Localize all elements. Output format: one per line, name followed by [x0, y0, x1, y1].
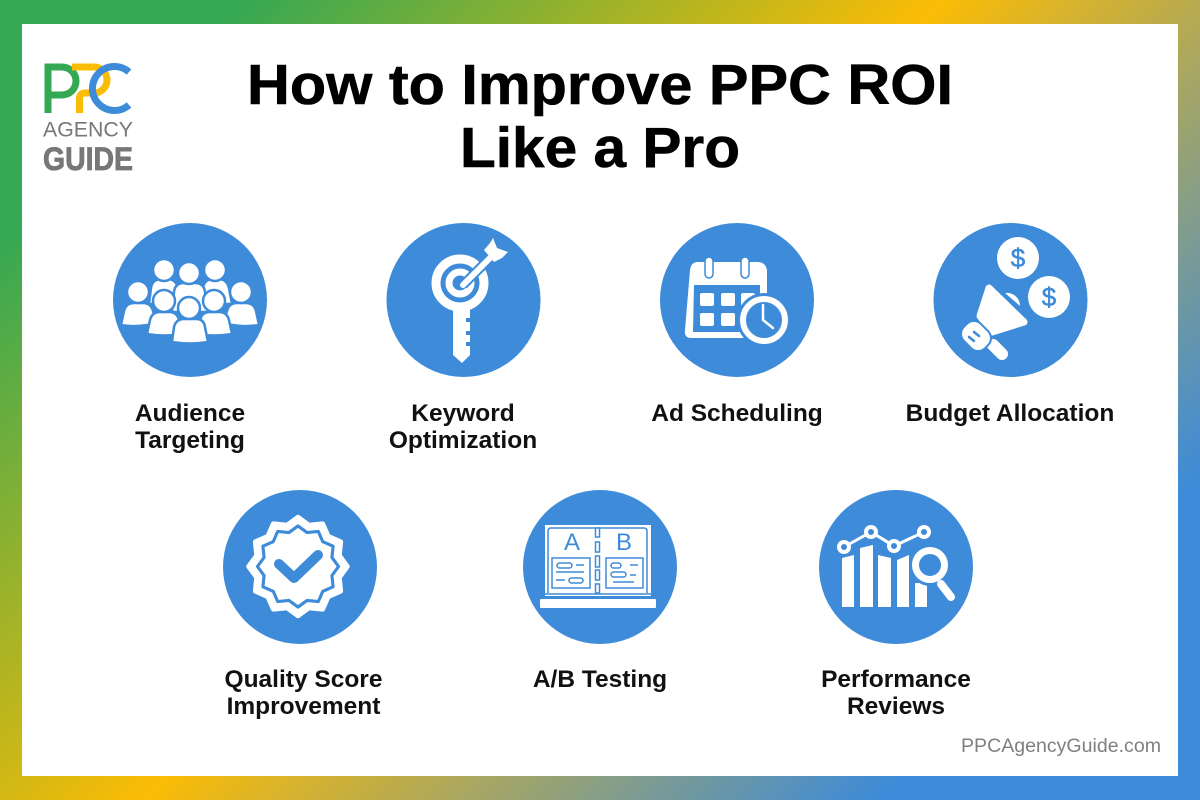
icon: quality badge	[223, 490, 377, 644]
logo: PPC Agency Guide: AGENCY	[43, 118, 133, 142]
item: Budget Allocation	[906, 223, 1114, 427]
label: Quality Score	[225, 666, 382, 693]
icon: megaphone and coins: $	[1042, 282, 1057, 312]
label: A/B Testing	[533, 666, 667, 693]
icon: chart and magnifier	[819, 490, 973, 644]
label: Performance	[821, 666, 971, 693]
item: Quality Score Improvement	[223, 490, 382, 720]
icon: megaphone and coins	[934, 223, 1088, 377]
item: Audience Targeting	[113, 223, 267, 454]
logo: PPC Agency Guide	[43, 66, 133, 177]
icon: audience group	[113, 223, 267, 377]
icon: megaphone and coins: $	[1011, 243, 1026, 273]
title: How to Improve PPC ROI	[247, 53, 953, 117]
label: Audience	[135, 400, 245, 427]
label: Budget Allocation	[906, 400, 1114, 427]
title	[247, 53, 953, 180]
icon: target key	[386, 223, 540, 377]
label: Improvement	[227, 693, 380, 720]
website footer: PPCAgencyGuide.com	[961, 736, 1161, 757]
icon: A/B laptop: A	[564, 529, 580, 556]
label: Optimization	[389, 427, 537, 454]
item: Performance Reviews	[819, 490, 973, 720]
title: Like a Pro	[460, 116, 740, 180]
logo: PPC Agency Guide: GUIDE	[43, 141, 133, 177]
label: Ad Scheduling	[651, 400, 823, 427]
icon: calendar and clock	[660, 223, 814, 377]
label: Keyword	[411, 400, 515, 427]
icon: A/B laptop	[523, 490, 677, 644]
icon: A/B laptop: B	[616, 529, 632, 556]
item: Ad Scheduling	[651, 223, 823, 427]
label: Reviews	[847, 693, 945, 720]
item: A/B Testing	[523, 490, 677, 693]
label: Targeting	[135, 427, 245, 454]
item: Keyword Optimization	[386, 223, 540, 454]
